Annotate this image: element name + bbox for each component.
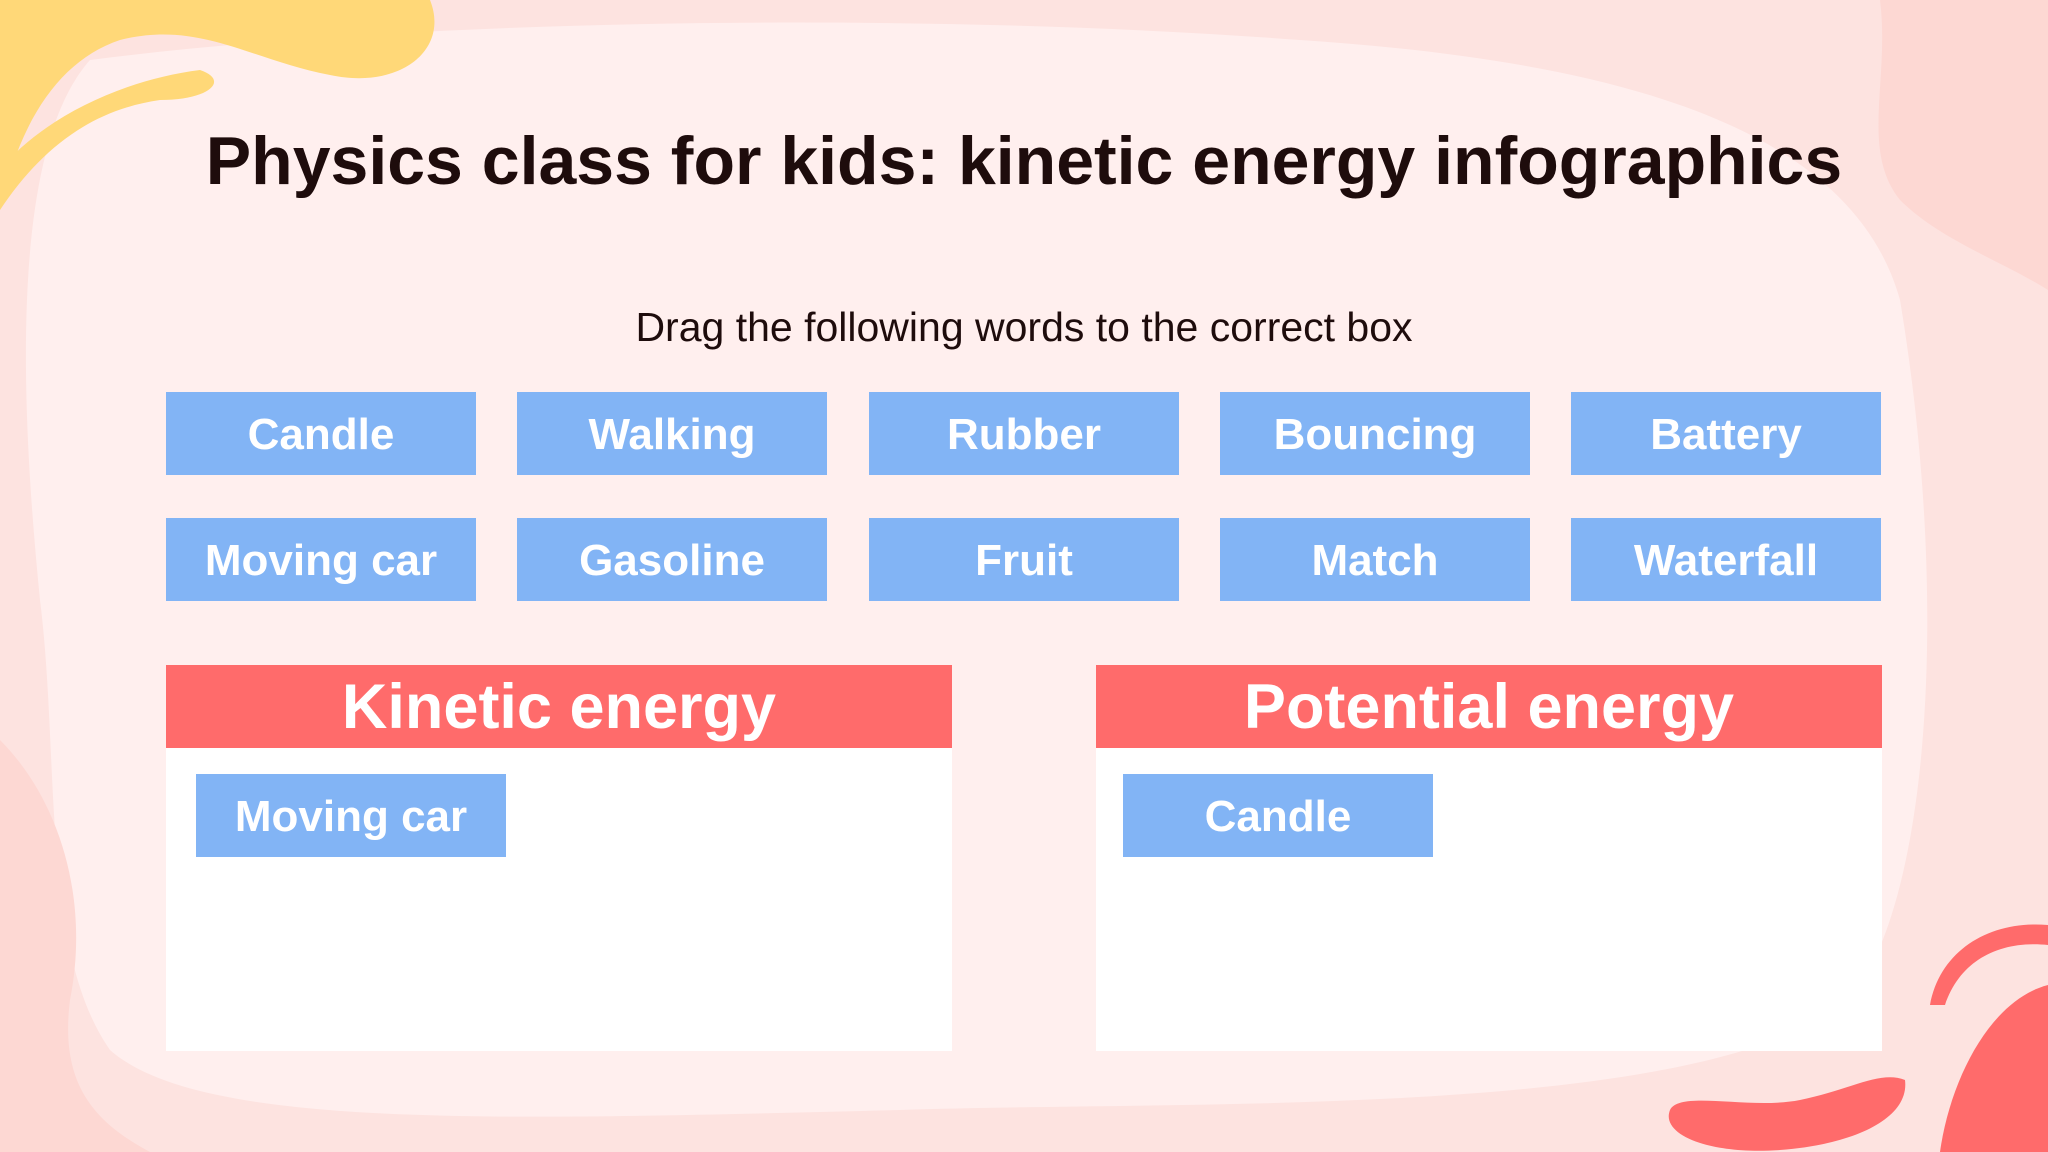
- tag: Candle placed: Candle: [1205, 792, 1351, 841]
- tag: Battery: Battery: [1650, 410, 1802, 459]
- tag: Candle placed: [1123, 774, 1433, 857]
- tag: Bouncing: [1220, 392, 1530, 475]
- tag: Walking: Walking: [588, 410, 756, 459]
- subtitle instruction: Drag the following words to the correct box: [635, 304, 1413, 350]
- tag: Gasoline: [517, 518, 827, 601]
- tag: Moving car placed: [196, 774, 506, 857]
- tag: Moving car placed: Moving car: [235, 792, 467, 841]
- tag: Gasoline: Gasoline: [579, 536, 765, 585]
- tag: Moving car: [166, 518, 476, 601]
- tag: Battery: [1571, 392, 1881, 475]
- word tags: [166, 392, 1881, 601]
- title: Physics class for kids: kinetic energy infographics: [206, 123, 1842, 199]
- tag: Rubber: [869, 392, 1179, 475]
- tag: Moving car: Moving car: [205, 536, 437, 585]
- tag: Walking: [517, 392, 827, 475]
- heading: kinetic energy: Kinetic energy: [342, 672, 776, 742]
- tag: Match: [1220, 518, 1530, 601]
- heading: potential energy: [1096, 665, 1882, 748]
- heading: potential energy: Potential energy: [1244, 672, 1734, 742]
- tag: Waterfall: [1571, 518, 1881, 601]
- panel: kinetic energy: [166, 665, 952, 1051]
- panel: potential energy: [1096, 665, 1882, 1051]
- heading: kinetic energy: [166, 665, 952, 748]
- tag: Waterfall: Waterfall: [1634, 536, 1818, 585]
- tag: Fruit: [869, 518, 1179, 601]
- tag: Candle: [166, 392, 476, 475]
- tag: Match: Match: [1311, 536, 1439, 585]
- tag: Fruit: Fruit: [975, 536, 1073, 585]
- tag: Candle: Candle: [248, 410, 394, 459]
- tag: Rubber: Rubber: [947, 410, 1101, 459]
- tag: Bouncing: Bouncing: [1274, 410, 1476, 459]
